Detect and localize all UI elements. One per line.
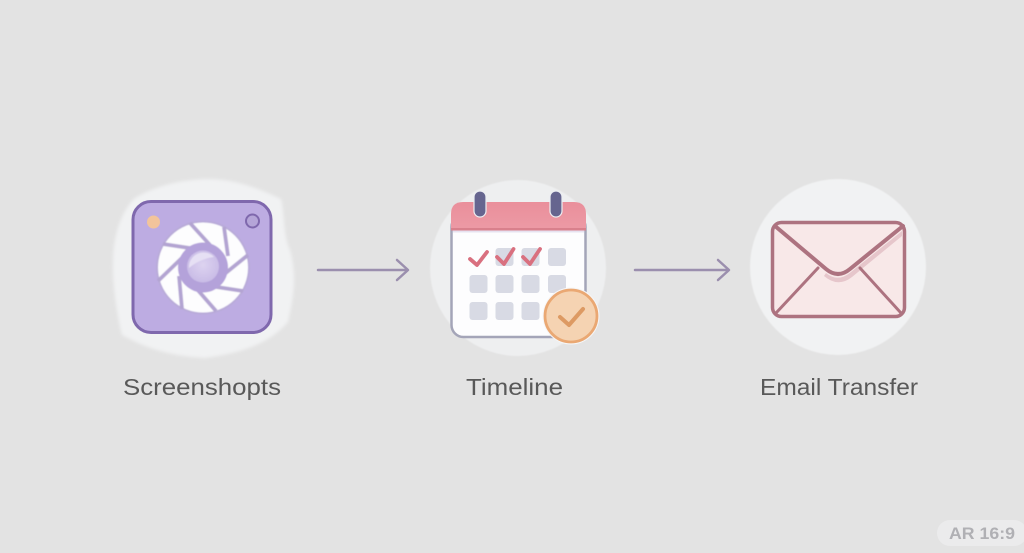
envelope flap shadow	[824, 231, 902, 282]
step: Email Transfer envelope icon	[750, 179, 926, 355]
calendar header	[451, 202, 586, 230]
camera body	[133, 202, 271, 332]
envelope flap	[775, 226, 903, 274]
icon backdrop circle	[430, 180, 606, 356]
label: Screenshopts: Screenshopts	[123, 374, 281, 400]
orange check badge	[542, 288, 600, 344]
calendar page	[452, 215, 586, 337]
label: Timeline: Timeline	[466, 374, 563, 400]
completed date checks	[470, 249, 540, 265]
arrow: screenshots to timeline	[318, 260, 408, 280]
lens	[178, 242, 228, 292]
viewfinder ring	[246, 214, 259, 228]
binder ring right	[550, 191, 562, 217]
icon backdrop blob	[113, 179, 294, 358]
envelope lower folds	[776, 268, 901, 313]
orange indicator dot	[147, 216, 160, 228]
date grid	[470, 248, 566, 320]
step: Screenshopts camera icon	[113, 179, 294, 358]
binder ring left	[474, 191, 486, 217]
label: Email Transfer: Email Transfer	[760, 374, 918, 400]
badge: aspect ratio	[937, 520, 1024, 546]
aperture	[157, 222, 249, 314]
step: Timeline calendar icon	[430, 180, 606, 356]
icon backdrop circle	[750, 179, 926, 355]
badge: aspect ratio: AR 16:9	[949, 524, 1015, 543]
arrow: timeline to email	[635, 260, 729, 280]
envelope body	[772, 222, 904, 316]
